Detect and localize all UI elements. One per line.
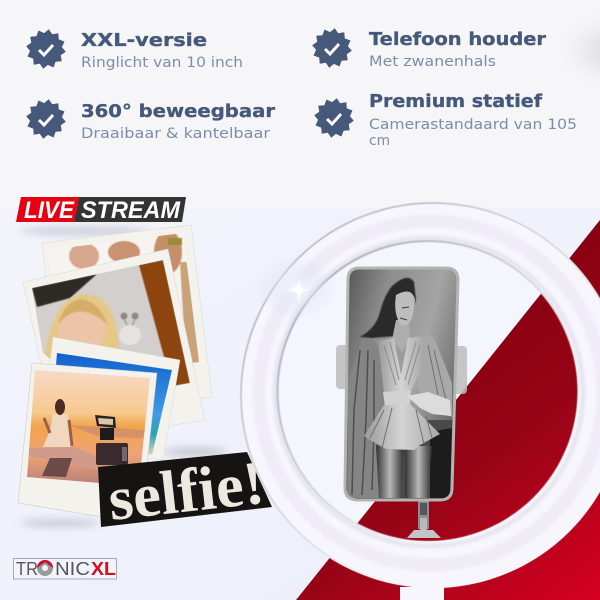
feature: 360 beweegbaar: [23, 96, 275, 142]
logo: TronicXL: [14, 558, 116, 579]
model: belt: [383, 390, 411, 406]
feature: Premium statief: cm: [369, 133, 390, 149]
feature: 360 beweegbaar: Draaibaar & kantelbaar: [81, 126, 270, 142]
live stream banner: STREAM: [81, 197, 181, 224]
phone with fashion photo: [340, 266, 460, 502]
live stream banner: LIVE: [24, 197, 75, 224]
model: neck and face: [392, 320, 410, 352]
feature: 360 beweegbaar: 360° beweegbaar: [81, 101, 275, 122]
feature: Premium statief: Premium statief: [369, 91, 542, 112]
feature: Telefoon houder: [309, 25, 546, 71]
icon: check badge: [309, 25, 355, 71]
icon: check badge: [23, 26, 69, 72]
model: right sleeve: [417, 336, 452, 417]
photo shadows: [20, 227, 227, 527]
icon: video camera: [95, 415, 128, 465]
selfie sticker: selfie!: [105, 449, 268, 534]
logo: TronicXL: TR: [16, 559, 38, 579]
model: hand and cuff: [407, 392, 451, 416]
red diagonal band: [296, 220, 600, 600]
ring light: [240, 202, 600, 600]
sparkle: [254, 256, 338, 320]
model: legs: [376, 446, 404, 498]
photo: blue polaroid: [40, 337, 180, 460]
live stream banner: [16, 197, 186, 224]
model: hair: [360, 278, 416, 338]
model: left drape: [347, 338, 386, 498]
phone clamps: [336, 345, 467, 394]
feature: XXL-versie: Ringlicht van 10 inch: [81, 55, 243, 71]
feature: Premium statief: [311, 91, 577, 149]
lighter area inside ring: [278, 242, 578, 542]
feature: XXL-versie: [23, 26, 243, 72]
logo: TronicXL: NIC: [55, 559, 90, 579]
phone stand stem: [407, 499, 441, 538]
logo: TronicXL: XL: [91, 559, 116, 579]
header panel: [580, 29, 600, 72]
photo: back polaroid: [42, 225, 212, 415]
model: skirt: [364, 404, 440, 450]
icon: check badge: [23, 96, 69, 142]
feature: Premium statief: Camerastandaard van 105: [369, 117, 577, 133]
model: dark chair: [430, 428, 452, 498]
photo: sunset polaroid with camera: [18, 363, 157, 520]
feature: Telefoon houder: Met zwanenhals: [369, 54, 496, 70]
icon: check badge: [311, 95, 357, 141]
feature: Telefoon houder: Telefoon houder: [369, 29, 546, 50]
lower background: [0, 208, 600, 600]
feature: XXL-versie: XXL-versie: [81, 30, 207, 51]
model: bodice: [378, 336, 424, 393]
photo: blonde woman polaroid: [22, 248, 206, 426]
